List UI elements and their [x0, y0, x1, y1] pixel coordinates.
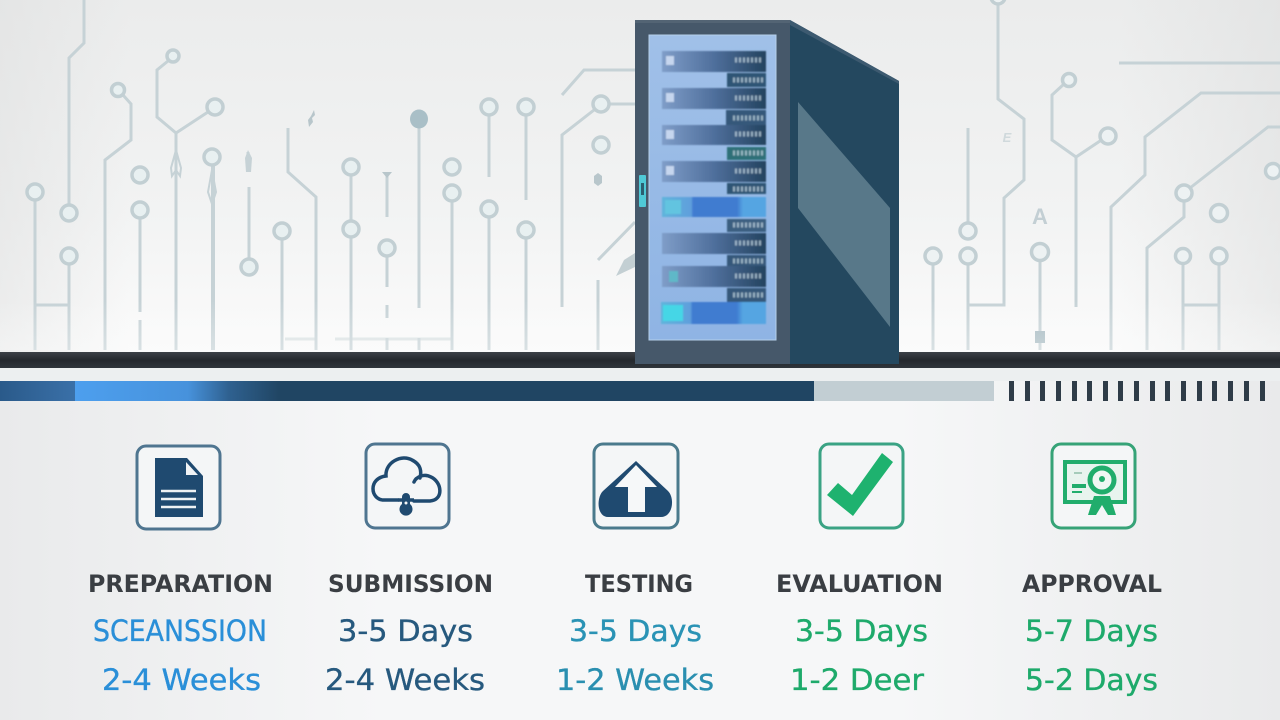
label: TESTING — [585, 570, 693, 598]
label: SUBMISSION — [328, 570, 493, 598]
value line 2: 2-4 Weeks — [325, 663, 485, 697]
progress: remaining segment — [814, 381, 994, 401]
server window — [649, 35, 776, 340]
server rack — [635, 20, 899, 364]
door handle — [639, 175, 646, 207]
server front — [635, 20, 790, 364]
progress: tick marks — [1009, 381, 1265, 401]
label: APPROVAL — [1022, 570, 1162, 598]
label: PREPARATION — [88, 570, 273, 598]
step: testing — [556, 570, 714, 697]
value line 2: 1-2 Weeks — [556, 663, 714, 697]
icon: document — [137, 446, 220, 529]
value line 2: 1-2 Deer — [790, 663, 924, 697]
circuit letter E: E — [1003, 130, 1012, 145]
circuit letter A: A — [1032, 204, 1048, 229]
dark shelf bar — [0, 352, 1280, 368]
rack units — [661, 51, 766, 324]
server side — [790, 20, 899, 364]
value line 1: 3-5 Days — [795, 614, 928, 648]
circuit nodes: right — [925, 0, 1280, 264]
circuit nodes: left — [27, 50, 609, 275]
side glass panel — [798, 102, 890, 327]
fade over circuit base — [0, 300, 1280, 350]
icon: certificate — [1052, 444, 1135, 528]
icon: check mark — [820, 444, 903, 528]
circuit traces: left — [27, 0, 636, 350]
value line 2: 2-4 Weeks — [102, 663, 261, 697]
icon: cloud — [366, 444, 449, 528]
step: submission — [325, 570, 493, 697]
circuit traces: right — [925, 0, 1280, 350]
value line 1: 3-5 Days — [338, 614, 473, 648]
step: preparation — [88, 570, 273, 697]
label: EVALUATION — [776, 570, 943, 598]
progress: first segment — [0, 381, 75, 401]
icon: upload — [594, 444, 678, 528]
value line 1: SCEANSSION — [93, 614, 267, 648]
step: evaluation — [776, 570, 943, 697]
value line 2: 5-2 Days — [1025, 663, 1158, 697]
step: approval — [1022, 570, 1162, 697]
value line 1: 3-5 Days — [569, 614, 702, 648]
progress: filled segment — [75, 381, 280, 401]
progress bar — [0, 381, 1265, 401]
value line 1: 5-7 Days — [1025, 614, 1158, 648]
